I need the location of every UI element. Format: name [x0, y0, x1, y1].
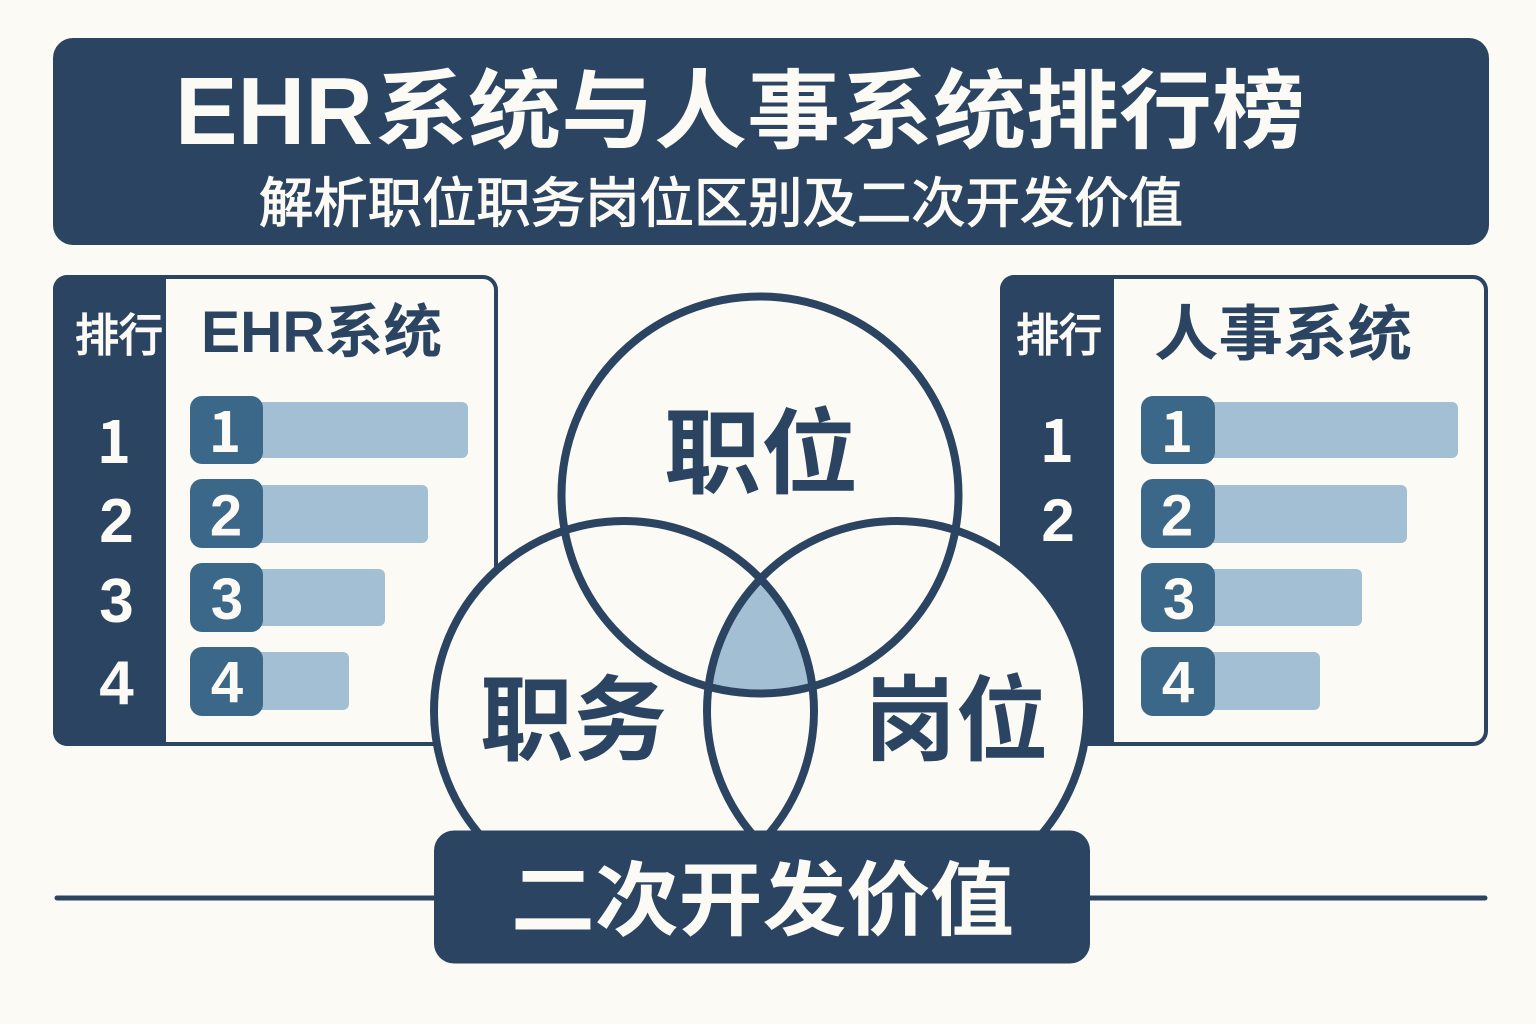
- rank column: [1016, 310, 1102, 554]
- venn label: duty: 职务: [480, 669, 667, 773]
- bar chart: EHR: 2: [210, 484, 242, 548]
- rank column: 3: [99, 567, 134, 636]
- rank column: 2: [99, 487, 134, 556]
- venn label: post: 岗位: [864, 669, 1048, 773]
- bar chart: HR: 3: [1163, 567, 1195, 632]
- panel: HR ranking: [1000, 275, 1486, 746]
- divider line: [57, 896, 1485, 900]
- rank column: 排行: [75, 310, 163, 361]
- rank column: 1: [1040, 395, 1074, 479]
- bar chart: HR: [1141, 388, 1458, 716]
- bar chart: HR: 4: [1162, 650, 1194, 715]
- venn label: position: 职位: [664, 402, 858, 506]
- title banner: [53, 38, 1489, 245]
- rank column: 1: [97, 396, 131, 480]
- panel heading: EHR系统: [201, 300, 442, 365]
- bar chart: EHR: 3: [211, 567, 243, 632]
- bar chart: HR: 1: [1161, 388, 1193, 468]
- title: [175, 58, 1305, 165]
- bottom banner: [434, 830, 1090, 964]
- bar chart: EHR: [190, 388, 468, 716]
- panel: EHR ranking: [53, 275, 496, 746]
- bar chart: EHR: 1: [209, 388, 241, 468]
- venn centre overlap: [713, 584, 808, 690]
- rank column: 2: [1041, 487, 1075, 554]
- panel heading: 人事系统: [1154, 301, 1412, 368]
- bar chart: EHR: 4: [211, 650, 243, 715]
- bar chart: HR: 2: [1161, 484, 1193, 548]
- subtitle: 解析职位职务岗位区别及二次开发价值: [259, 174, 1183, 234]
- banner label: 二次开发价值: [511, 857, 1014, 947]
- title: EHR: [175, 58, 373, 165]
- rank column: 4: [99, 649, 134, 718]
- rank column: 排行: [1016, 310, 1102, 361]
- rank column: [75, 310, 163, 718]
- venn diagram: [430, 292, 1088, 830]
- title: 系统与人事系统排行榜: [375, 64, 1305, 160]
